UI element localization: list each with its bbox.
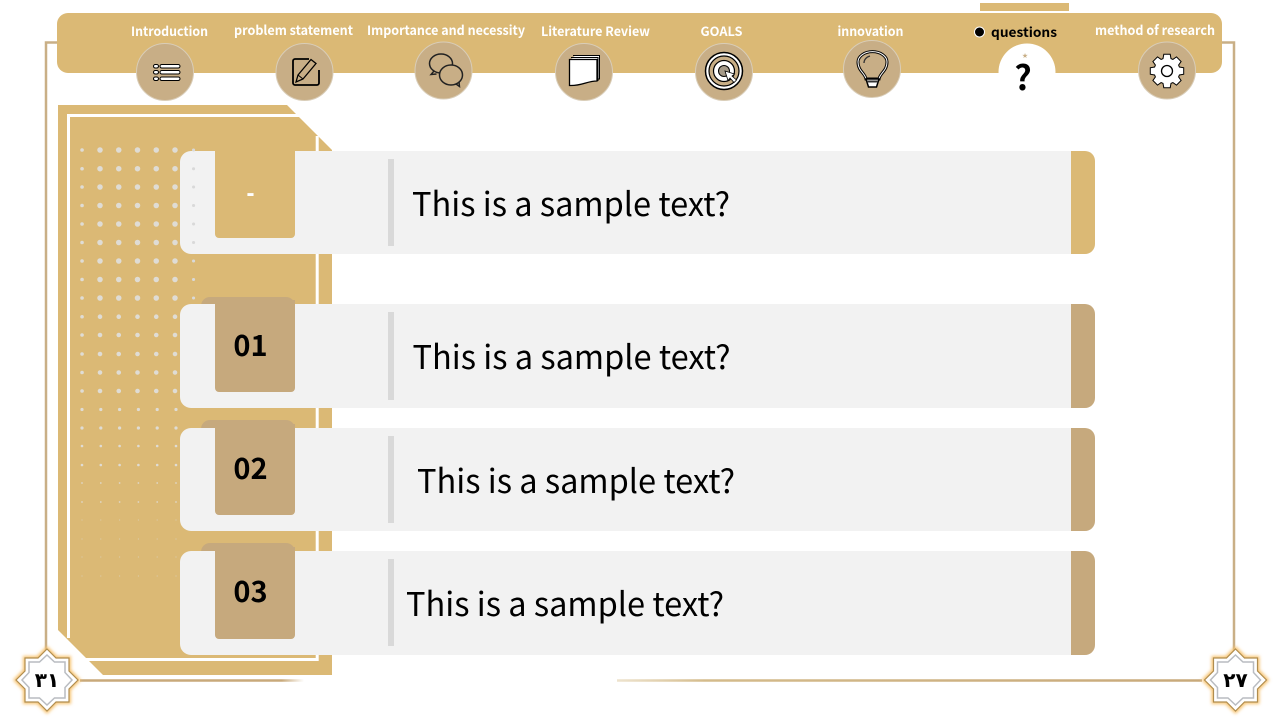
row end cap xyxy=(1071,151,1095,254)
badge 02 xyxy=(215,424,295,515)
side panel: gold chamfered background xyxy=(58,105,332,675)
row text: This is a sample text? xyxy=(412,331,730,379)
divider bar xyxy=(388,559,394,646)
icon: speech bubbles xyxy=(415,42,472,99)
star badge: left page number: ۳۱ xyxy=(35,668,59,692)
panel: row 1 question xyxy=(180,297,1095,408)
row end cap xyxy=(1071,428,1095,531)
badge with dash: - xyxy=(246,180,254,207)
badge 01: 01 xyxy=(233,323,268,365)
bar background xyxy=(57,13,1222,73)
dot pattern xyxy=(82,150,176,576)
row background xyxy=(180,304,1085,408)
nav label: method of research: method of research xyxy=(1095,20,1215,39)
navigation bar xyxy=(57,3,1222,100)
icon: light bulb xyxy=(844,40,900,98)
panel: row 2 question xyxy=(180,420,1095,531)
row background xyxy=(180,551,1085,655)
row text: This is a sample text? xyxy=(412,178,730,226)
row background xyxy=(180,151,1085,254)
icon: stacked pages xyxy=(556,44,612,100)
badge back tab xyxy=(201,420,295,460)
nav label: Literature Review: Literature Review xyxy=(541,21,650,40)
badge 03 xyxy=(215,547,295,639)
panel: row 3 question xyxy=(180,543,1095,655)
row background xyxy=(180,428,1085,531)
panel: row 0 question xyxy=(180,151,1095,254)
badge 01 xyxy=(215,300,295,392)
row end cap xyxy=(1071,551,1095,655)
row text: This is a sample text? xyxy=(406,578,724,626)
nav label: Importance and necessity: Importance and necessity xyxy=(367,20,526,39)
badge 03: 03 xyxy=(233,569,268,611)
icon: gear xyxy=(1138,42,1196,99)
icon: question mark (active): ★ xyxy=(1022,52,1028,60)
nav label: questions (active): questions xyxy=(991,22,1057,41)
icon: target xyxy=(696,44,752,100)
divider bar xyxy=(388,159,394,246)
faint dots over row 0 xyxy=(192,150,195,391)
star badge: right page number: ۲۷ xyxy=(1223,668,1248,692)
star badge: right page number xyxy=(1202,646,1270,714)
divider bar xyxy=(388,312,394,400)
nav label: innovation: innovation xyxy=(838,21,904,40)
active tab marker xyxy=(980,3,1069,11)
icon: pencil on note xyxy=(276,44,333,100)
badge 02: 02 xyxy=(233,446,268,488)
nav label: Introduction: Introduction xyxy=(131,21,208,40)
nav label: problem statement: problem statement xyxy=(234,20,353,39)
star badge: left page number xyxy=(13,646,81,714)
nav label: GOALS: GOALS xyxy=(700,21,742,40)
badge back tab xyxy=(201,297,295,337)
row text: This is a sample text? xyxy=(417,455,735,503)
icon: list xyxy=(136,44,194,100)
icon: question mark (active) xyxy=(998,44,1056,100)
row end cap xyxy=(1071,304,1095,408)
badge back tab xyxy=(201,543,295,583)
divider bar xyxy=(388,436,394,523)
badge with dash xyxy=(215,151,295,238)
icon: question mark (active): ? xyxy=(1014,51,1032,100)
